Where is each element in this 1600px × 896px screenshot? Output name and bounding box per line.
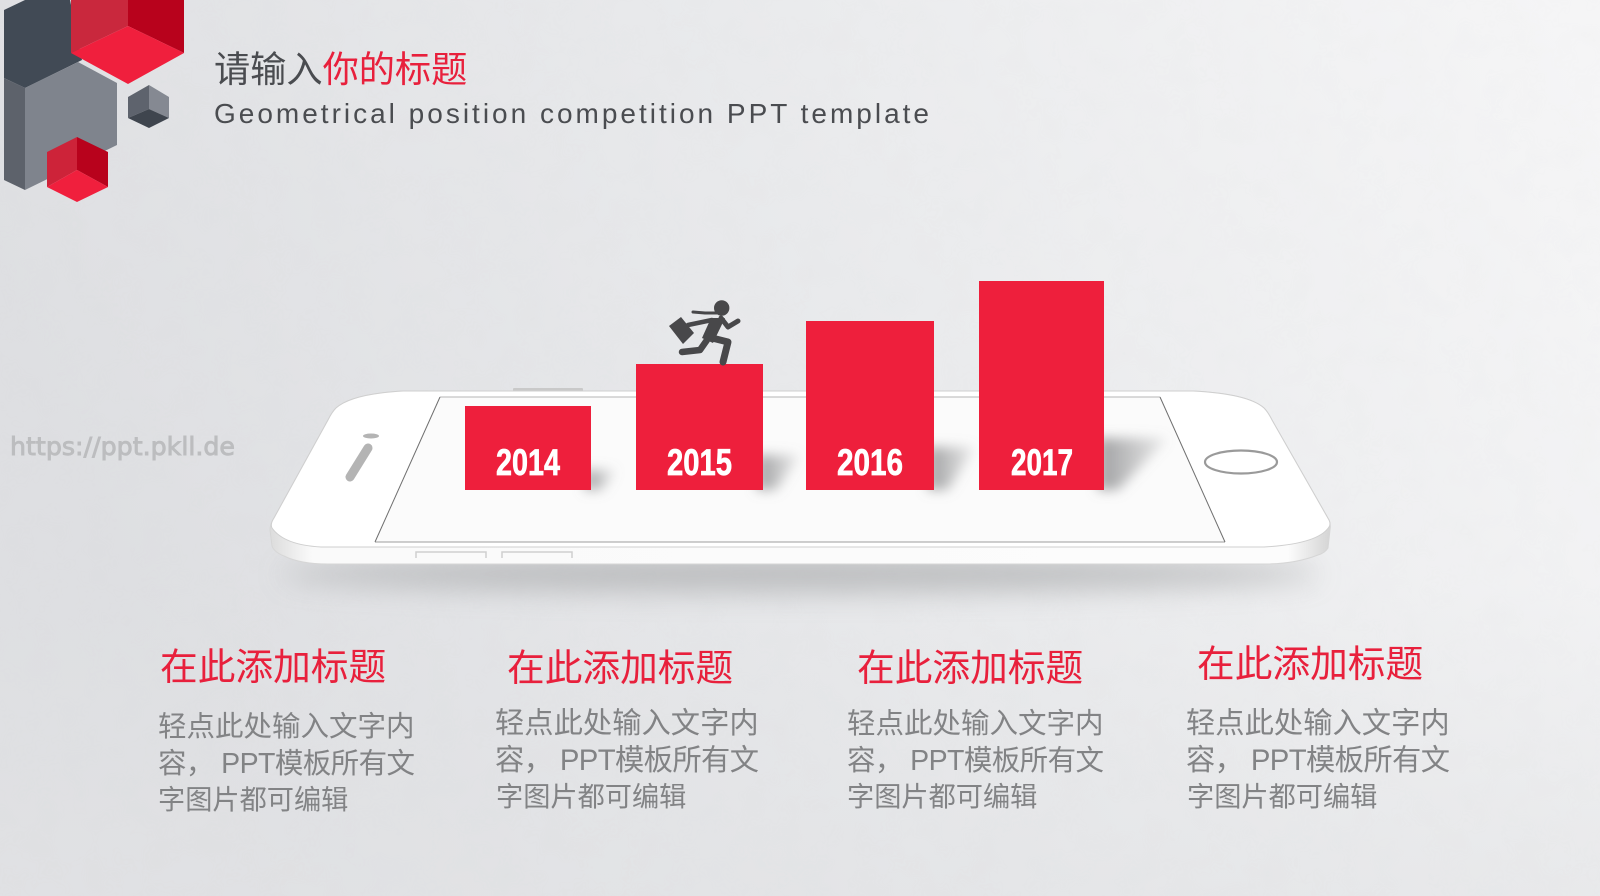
body 1: 轻点此处输入文字内 [158,711,415,743]
body 4 [1186,707,1450,812]
bar chart [465,281,1104,490]
title: 请输入你的标题 [214,49,467,90]
body 3 [847,708,1104,812]
column 3 [847,647,1104,812]
top button [513,388,583,392]
body 2 [495,707,759,812]
screen [375,397,1225,542]
bar 2016 [806,321,934,490]
heading 2: 在此添加标题 [507,647,733,689]
column 1 [158,646,415,815]
speaker [350,448,368,477]
logo: hexagonal cubes [4,0,184,202]
bar shadows [585,438,1168,490]
bar 2016: 2016 [837,442,903,483]
body 2: 字图片都可编辑 [496,781,686,812]
heading 1: 在此添加标题 [160,646,386,688]
bar 2015: 2015 [667,442,732,483]
bar 2014: 2014 [496,442,560,483]
watermark: https://ppt.pkll.de [10,432,235,461]
home button [1205,450,1277,474]
phone shadow [280,556,1320,592]
heading 3: 在此添加标题 [857,647,1083,689]
heading 4: 在此添加标题 [1197,643,1423,685]
bottom buttons [416,552,572,558]
body 1: 容， PPT模板所有文 [158,748,415,780]
body 1 [158,711,415,815]
body 3: 轻点此处输入文字内 [847,708,1104,740]
body 2: 容， PPT模板所有文 [495,744,759,777]
column 2 [495,647,759,812]
body 3: 容， PPT模板所有文 [847,745,1104,777]
bar 2015 [636,364,763,490]
bar 2014 [465,406,591,490]
body 2: 轻点此处输入文字内 [495,707,759,740]
phone [270,388,1330,564]
icon: running businessman [669,300,738,362]
bar 2017 [979,281,1104,490]
body 1: 字图片都可编辑 [158,784,348,815]
subtitle: Geometrical position competition PPT template [214,98,929,129]
body 4: 字图片都可编辑 [1187,781,1377,812]
body 4: 容， PPT模板所有文 [1186,744,1450,777]
body 4: 轻点此处输入文字内 [1186,707,1450,740]
body 3: 字图片都可编辑 [847,781,1037,812]
column 4 [1186,643,1450,812]
bar 2017: 2017 [1011,442,1073,483]
